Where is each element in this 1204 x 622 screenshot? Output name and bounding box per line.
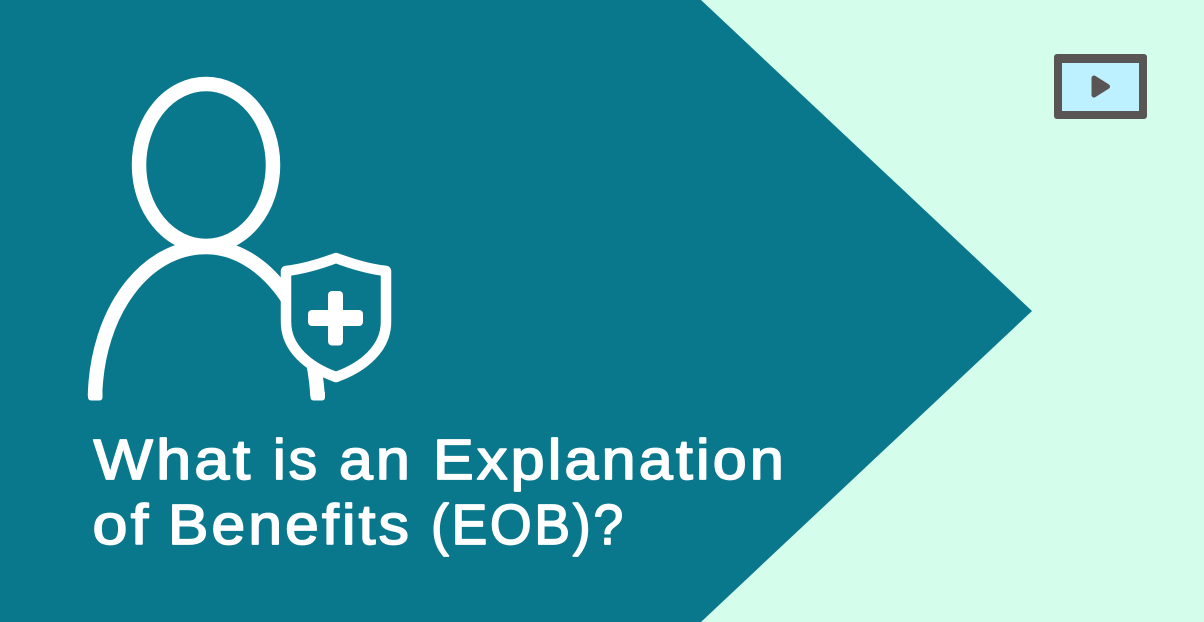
- title: [92, 428, 787, 557]
- title: (EOB)?: [431, 493, 626, 557]
- video frame: [1054, 54, 1147, 119]
- title: is: [273, 428, 320, 492]
- title: Explanation: [433, 428, 787, 492]
- title: of: [92, 493, 152, 557]
- video screen: [1062, 63, 1139, 111]
- icon: person body: [95, 247, 318, 396]
- icon: shield: [286, 258, 386, 377]
- icon: medical cross: [308, 291, 363, 346]
- icon: video player: [1054, 54, 1147, 119]
- title: an: [339, 428, 413, 492]
- icon: person with shield: [88, 84, 386, 400]
- icon: body left foot: [88, 390, 102, 400]
- icon: person head: [139, 84, 273, 246]
- title: Benefits: [168, 493, 412, 557]
- icon: body right foot: [310, 390, 325, 400]
- title: What: [94, 428, 254, 492]
- play button: [1094, 78, 1108, 95]
